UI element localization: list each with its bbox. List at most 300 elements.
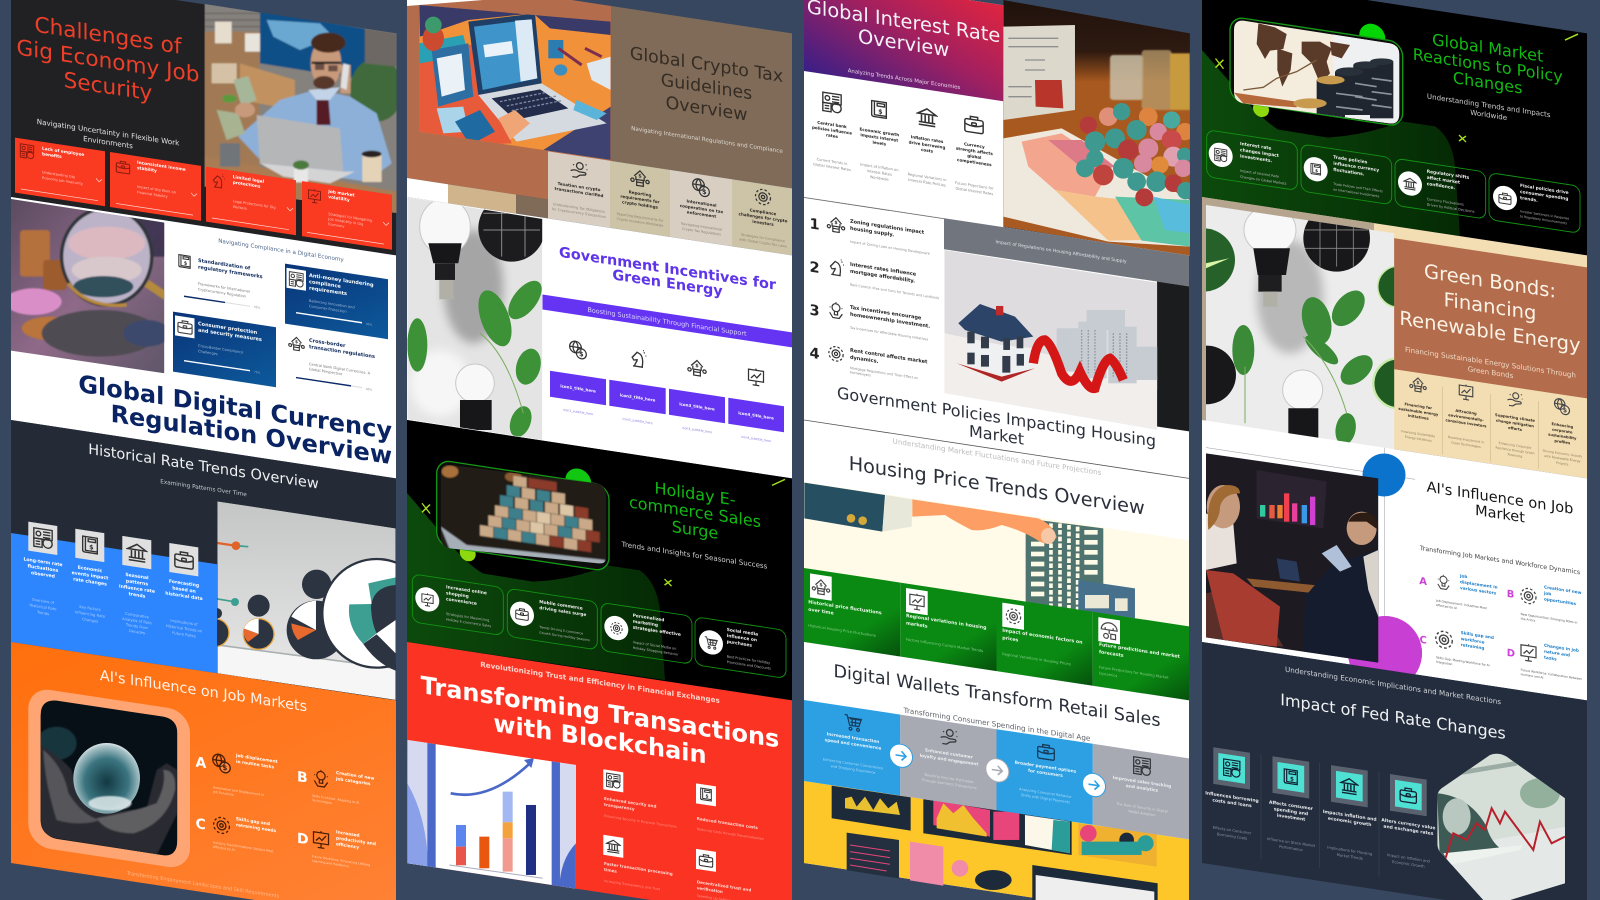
subtitle: Environments [83,134,133,151]
item 3 [603,835,673,893]
item 3: icon3_subtitle_here [682,426,712,434]
card 4: Investor Sentiment in Response [1520,209,1569,221]
cell 2: Clean Technologies [1451,441,1481,449]
item A: Automation and Displacement in [213,785,264,797]
title: Government Policies Impacting Housing [837,383,1156,451]
column 4 [1381,773,1435,870]
photo: light bulbs and leaves [407,195,548,440]
card 1: Increased online [446,584,487,597]
column: currency strength [955,114,994,196]
column 4: Alters currency value [1381,817,1435,831]
column: inflation rates: Regional Variations in [908,172,946,182]
card 2: driving sales surge [539,605,586,618]
title: Government Incentives for [559,245,777,294]
title: Overview [858,25,949,62]
column: forecasting [165,542,203,640]
column 2 [1267,755,1316,854]
cell 1: Energy Initiatives [1405,435,1432,443]
cell: reporting [610,161,670,237]
item 1 [550,337,606,418]
cell: taxation: Understanding Tax Obligations [553,202,605,214]
card: inconsistent income stability: Impact of Gig Work on [137,185,176,195]
process step 1: speed and convenience [825,737,881,752]
cell: cooperation: enforcement [687,209,716,219]
column: forecasting: Historical Trends on [166,624,203,634]
column: long-term rate: Historical Rate [30,603,57,612]
item D: productivity and [336,835,376,847]
cell 3 [1495,390,1535,461]
slide: Global Interest Rate Overview [804,0,1194,257]
column: central bank: Current Trends in [817,157,847,166]
item B: Creation of new [1544,584,1582,595]
subtitle: Navigating Compliance in a Digital Economy [218,238,344,264]
photo: colored balls on a chart [1003,0,1194,257]
column 1: Borrowing Costs [1217,832,1247,841]
title: Global Market [1432,30,1543,66]
item 2: icon2_title_here [620,392,656,403]
subtitle band [542,295,792,347]
column: seasonal patterns: influence rate [119,584,155,595]
column 4: Economic Growth [1392,860,1425,869]
slide: Holiday E-commerce Sales Surge [407,420,792,700]
card 2: Trade policies [1333,154,1368,166]
card: anti-money laundering: Balancing Innovation and [309,299,355,310]
card 1: changes impact [1240,147,1279,159]
slide text: Global Market [1207,0,1580,233]
photo: bulbs, leaves and green rings [1206,205,1394,450]
column 2: investment [1277,813,1306,823]
item B: the AI Era [1521,617,1536,623]
row 2: 2 [810,259,820,277]
item 3: icon3_title_here [679,401,715,412]
title: Regulation Overview [111,400,392,470]
photo: couple reviewing data at a table [1206,450,1379,663]
cell 2: environmentally- [1448,413,1484,423]
card 4: Best Practices for Holiday [727,655,770,665]
cell: compliance [732,179,792,255]
column: currency strength: competiveness [957,157,992,167]
column: economic events: events impact [72,570,109,582]
column: long-term rate: observed [31,570,55,580]
item C [196,810,277,858]
card: standardization [179,255,263,310]
card 2 [1301,144,1392,205]
card: standardization: Cryptocurrency Regulation [198,287,246,299]
column: forecasting: Implications of [170,619,198,627]
row 3: homeownership investment. [850,312,930,330]
slide: Global Crypto Tax Guidelines Overview [407,0,792,255]
subtitle band: Boosting Sustainability Through Financial Support [588,306,747,338]
slide text: Interest Rate [807,0,1000,199]
card: cross-border: transaction regulations [309,344,375,360]
card: inconsistent income stability: stability [137,165,157,174]
title: with Blockchain [493,709,707,769]
cell 2 [1445,381,1487,450]
cell 1: Financing for [1405,402,1432,410]
cell 3: prices [1002,635,1019,644]
card: job market volatility: Economy [328,222,344,229]
item A: Affected by AI [1436,603,1457,610]
cell: compliance: Compliance [750,207,777,216]
item 2: icon2_subtitle_here [622,417,653,425]
card: anti-money laundering: Anti-money laundering [309,273,374,289]
subtitle: Worldwide [1470,108,1507,122]
card: lack of employee benefits: benefits [42,151,62,160]
title: Market [969,421,1024,449]
card 2: Trends Driving E-commerce [538,625,583,636]
cell: compliance: investors [752,219,774,227]
card 1: shopping [446,590,469,600]
card 1: Holiday E-commerce Sales [446,617,491,628]
title: Transforming Transactions [421,671,779,753]
item C [1420,624,1494,673]
slide: Global Digital Currency Regulation Overview [5,197,396,478]
subtitle: Trends and Insights for Seasonal Success [621,539,768,571]
cell 2: Boosting Investment in [1448,435,1484,444]
process step 3: Shifts with Digital Payments [1021,793,1070,804]
item D: nature and [1544,649,1570,658]
photo: dollar bill with red line chart [1437,750,1567,900]
subtitle: Green Bonds [1468,364,1514,380]
card: cross-border: Cross-border [309,338,346,349]
process step 1: Enhancing Customer Convenience [823,757,883,770]
card: lack of employee benefits [15,138,105,206]
cell 3: Enhancing Corporate [1499,441,1531,450]
process step 2: loyalty and engagement [920,753,978,768]
dividers with dots [1261,754,1379,877]
column: forecasting: historical data [165,591,203,602]
card 4 [695,617,786,678]
card: consumer protection: and security measures [198,327,262,343]
card: job market volatility [302,181,392,250]
card 4 [1489,173,1580,233]
item D: efficiency [336,841,359,851]
title: Guidelines [661,71,752,104]
card: consumer protection: Cross-Border Compliance [198,344,244,355]
column 1: Influences borrowing [1205,790,1259,804]
cell 4: Enhancing [1551,422,1573,429]
item A: Job [1459,573,1467,579]
process step 2: Through Seamless Transactions [920,778,977,790]
slide text: AI job markets [100,668,376,900]
title: Changes [1453,68,1522,98]
column: currency strength: strength affects [956,146,993,156]
process step 4: Improved sales tracking [1113,775,1171,790]
column 4: Impact on Inflation and [1387,853,1431,864]
subtitle: Transforming Consumer Spending in the Digital Age [903,706,1091,743]
row 2 [810,255,940,300]
column: central bank: Central bank [817,120,847,129]
column 3: economic growth [1328,816,1371,828]
row 4: Mortgage Regulations and Their Effect on [850,366,918,380]
cell 4: forecasts [1099,649,1124,659]
process step 1: Increased transaction [827,731,879,745]
column: forecasting: based on [172,585,196,595]
subtitle: Understanding Market Fluctuations and Future Projections [893,436,1102,477]
card: lack of employee benefits: Economy Job Insecurity [42,176,83,186]
column: economic events: Key Factors [79,605,101,612]
column: central bank: rates [826,132,839,139]
item A: Job Displacement: Industries Most [1435,598,1488,610]
item C: workforce [1461,636,1485,645]
item B: New Opportunities: Emerging Roles in [1521,612,1577,625]
slide text: Green Bonds [1398,256,1582,476]
column 4: slide stack [1172,0,1587,900]
card: consumer protection: Challenges [198,349,218,356]
card: job market volatility: Job Instability in Gig [327,217,363,226]
item B [1507,579,1582,630]
slide text: Holiday [412,423,786,678]
decorations [1216,0,1578,159]
row 1: Impact of Zoning Laws on Housing Development [850,240,931,256]
card 1: Strategies for Maximizing [446,612,489,622]
cell 2: Attracting [1455,409,1477,416]
title: Global Crypto Tax [630,44,783,87]
item C: Industry Transformations: Sectors Most [213,840,274,854]
cell: cooperation: Navigating International [681,222,722,232]
card 3: Currency Fluctuations [1427,197,1464,207]
card 2: on International Investments [1333,187,1380,198]
slide: Historical Rate Trends Overview [11,420,431,700]
title: Gig Economy Job [17,35,199,88]
card 3: affect market [1427,175,1460,186]
column 3: Impacts inflation and [1323,809,1377,823]
title: Green Energy [612,267,723,300]
item D [1507,637,1582,686]
card: job market volatility: volatility [328,194,350,203]
card: anti-money laundering [285,264,388,339]
cell 2 [900,583,996,671]
cell 2: markets [906,620,928,630]
item 4: icon4_subtitle_here [741,435,771,443]
slide text: Historical Rate [23,431,319,662]
card 3 [1395,158,1486,219]
title: Overview [666,93,747,126]
cell 4: profiles [1554,439,1571,445]
cell 1 [1398,375,1439,444]
item A: Job displacement [235,753,278,765]
card: limited legal protections: Workers [233,205,247,211]
title: Market [1475,502,1525,527]
slide text: Green Energy [542,242,792,446]
cell 3: Regional Variations in Housing Prices [1002,652,1071,666]
process step 1: and Shopping Experience [831,764,875,775]
column: long-term rate: fluctuations [28,563,59,574]
title: commerce Sales [629,492,761,531]
cell: compliance: Strategies for Compliance [741,233,785,243]
title: AI's Influence on Job [1427,479,1573,518]
item B: B [297,769,308,787]
item A [196,747,278,804]
slide: Green Bonds: Financing Renewable Energy [1172,197,1587,478]
column: economic growth: Economic growth [859,126,899,137]
cell 4: Future predictions and market [1099,642,1180,660]
title: Reactions to Policy [1413,45,1563,86]
item D: Future Workforce: Collaboration Between [1521,668,1582,681]
cell: taxation [548,151,610,228]
cell 2: conscious investors [1445,418,1487,429]
cell: reporting: Crypto Investors Worldwide [617,217,663,228]
column: economic events [72,528,109,625]
title: Security [64,68,152,106]
card: standardization: Standardization of [198,258,251,272]
card 3: Regulatory shifts [1427,169,1470,181]
subtitle on band: Impact of Regulations on Housing Affordability and Supply [995,239,1127,265]
card: lack of employee benefits: Lack of employee [42,146,84,158]
cell: compliance: challenges for crypto [739,211,788,224]
item C: Skills Gap: Meeting Workforce for AI [1436,655,1490,667]
card 3: Personalized [633,613,664,623]
process step 1 [804,700,900,796]
row 4: dynamics. [850,355,879,365]
arrow 1 [890,742,912,769]
slide text: AI job market [1419,477,1582,686]
column: seasonal patterns: Analysis of Rate [122,617,153,625]
column: currency strength: Global Interest Rates [955,186,993,196]
card 4: Fiscal policies drive [1520,183,1569,196]
cell: taxation: Taxation on crypto [558,181,601,192]
item A: A [196,755,206,772]
card: cross-border: Central Bank Digital Currencies: A [309,362,371,376]
process step 2: Enhanced customer [925,747,974,761]
chart: stacked bars with arrow [407,737,576,890]
cell: cooperation [670,170,732,246]
item C: Affected by AI [213,845,235,852]
column: central bank: Global Interest Rates [813,162,851,172]
slide text: Crypto Tax [548,31,792,255]
row 1 [810,213,931,256]
card 3: confidence. [1427,181,1455,191]
row 3: Tax Incentives for Affordable Housing Initiatives [849,326,928,342]
cell 4: with Renewable Energy [1544,454,1581,463]
item 3: Increasing Transparency and Trust [604,879,661,891]
item C: retraining needs [236,822,277,834]
photo: parcels on a laptop [439,463,608,567]
card: standardization: regulatory frameworks [198,264,263,280]
slide: Housing Price Trends Overview [804,420,1189,700]
decorations [422,424,785,603]
card 1: investments. [1240,153,1272,164]
card: consumer protection [173,312,276,387]
column 3 [1323,764,1377,863]
item 4: verification [697,885,723,894]
column: economic growth [859,99,899,183]
card: consumer protection: 75% [254,370,261,375]
cell 4: Driving Economic Growth [1543,449,1582,459]
slide: Transforming Transactions with Blockchain [407,642,792,900]
item D [297,823,376,872]
card 3: Holiday Shopping Behavior [633,646,679,657]
cell 1: Historical Housing Price Fluctuations [808,624,876,638]
card 2 [507,588,597,650]
card: limited legal protections [206,167,296,235]
row 1: housing supply. [850,226,894,238]
photo: man with laptop and cash [204,0,403,213]
subtitle: Analyzing Trends Across Major Economies [848,68,960,91]
decorative sliver [407,0,483,6]
item 1 [603,769,677,829]
card: anti-money laundering: compliance [309,279,341,290]
column: seasonal patterns: Trends Over [125,623,149,630]
slide: Impact of Fed Rate Changes [1202,642,1587,900]
card: inconsistent income stability [110,152,201,221]
title: AI's Influence on Job Markets [100,668,307,715]
cell 4 [1543,396,1582,469]
subtitle: Understanding Economic Implications and Market Reactions [1285,665,1501,706]
item 1: icon1_title_here [560,383,596,394]
card: limited legal protections: Limited legal [233,174,265,185]
item D: Humans and AI [1521,672,1544,680]
column: central bank: policies influence [812,125,852,136]
slide text: Housing Price [804,423,1189,700]
item A: various sectors [1460,585,1497,596]
cell 4 [1093,612,1189,700]
item 4: icon4_title_here [738,410,774,421]
column: economic events: Influencing Rate [75,610,106,619]
photo: magnifying glass over coins [5,197,170,377]
column: currency strength: global [967,153,982,160]
column: economic events: Economic [78,565,102,574]
card 1: convenience [446,596,477,607]
column: inflation rates: Interest Rate Policies [908,178,946,188]
card: anti-money laundering: requirements [309,286,347,297]
cell: cooperation: International [686,198,717,208]
title: Historical Rate Trends Overview [88,441,319,493]
process step 3: Analyzing Consumer Behavior [1019,787,1072,799]
card: consumer protection: Consumer protection [198,321,258,336]
card: cross-border: 85% [366,387,373,392]
card 3: marketing [633,619,658,628]
item 2: Reducing Costs through Decentralization [697,827,764,841]
title: Financing [1444,288,1536,325]
process step 3 [996,729,1093,825]
card 2: influence currency [1333,161,1379,174]
cell 3: Resilience through Green [1495,446,1535,455]
item D: D [1507,648,1515,660]
column: inflation rates: drive borrowing [909,139,945,150]
title: Renewable Energy [1399,307,1581,357]
item C: C [196,816,206,834]
column 2: Influence on Stock Market [1267,837,1316,848]
column: seasonal patterns: trends [129,591,146,600]
item A: displacement in [1460,579,1498,590]
item A: A [1419,576,1427,588]
item 3: times [604,867,617,874]
cell 4: corporate [1552,428,1573,435]
item D: Future Workforce: Embracing Lifelong [312,854,370,867]
card 4: trends. [1520,195,1538,204]
card 2: fluctuations. [1333,167,1365,178]
row 1: 1 [810,215,820,234]
item 2 [609,346,666,427]
arrow 2 [986,757,1009,784]
process step 3: Broader payment options [1015,760,1077,775]
column: economic events: rate changes [73,577,107,588]
row 4: Homebuyers [850,370,871,378]
card 1: Interest rate [1240,141,1271,152]
item B: Skills Evolution: Adapting to AI [312,794,359,805]
card 4: Promotions and Discounts [727,660,771,671]
slide: Global Market Reactions to Policy Changes [1202,0,1587,255]
photo: pointing hand and city building [804,483,1135,618]
subtitle: Transforming Job Markets and Workforce Dynamics [1419,545,1580,576]
card 1 [412,574,503,636]
process step 4: Wallet Adoption [1128,809,1156,817]
card: anti-money laundering: Consumer Protection [309,304,347,314]
slide: Government Policies Impacting Housing Market [804,197,1189,478]
card 4: influence on [727,633,757,643]
column: forecasting: Future Rates [172,631,196,639]
